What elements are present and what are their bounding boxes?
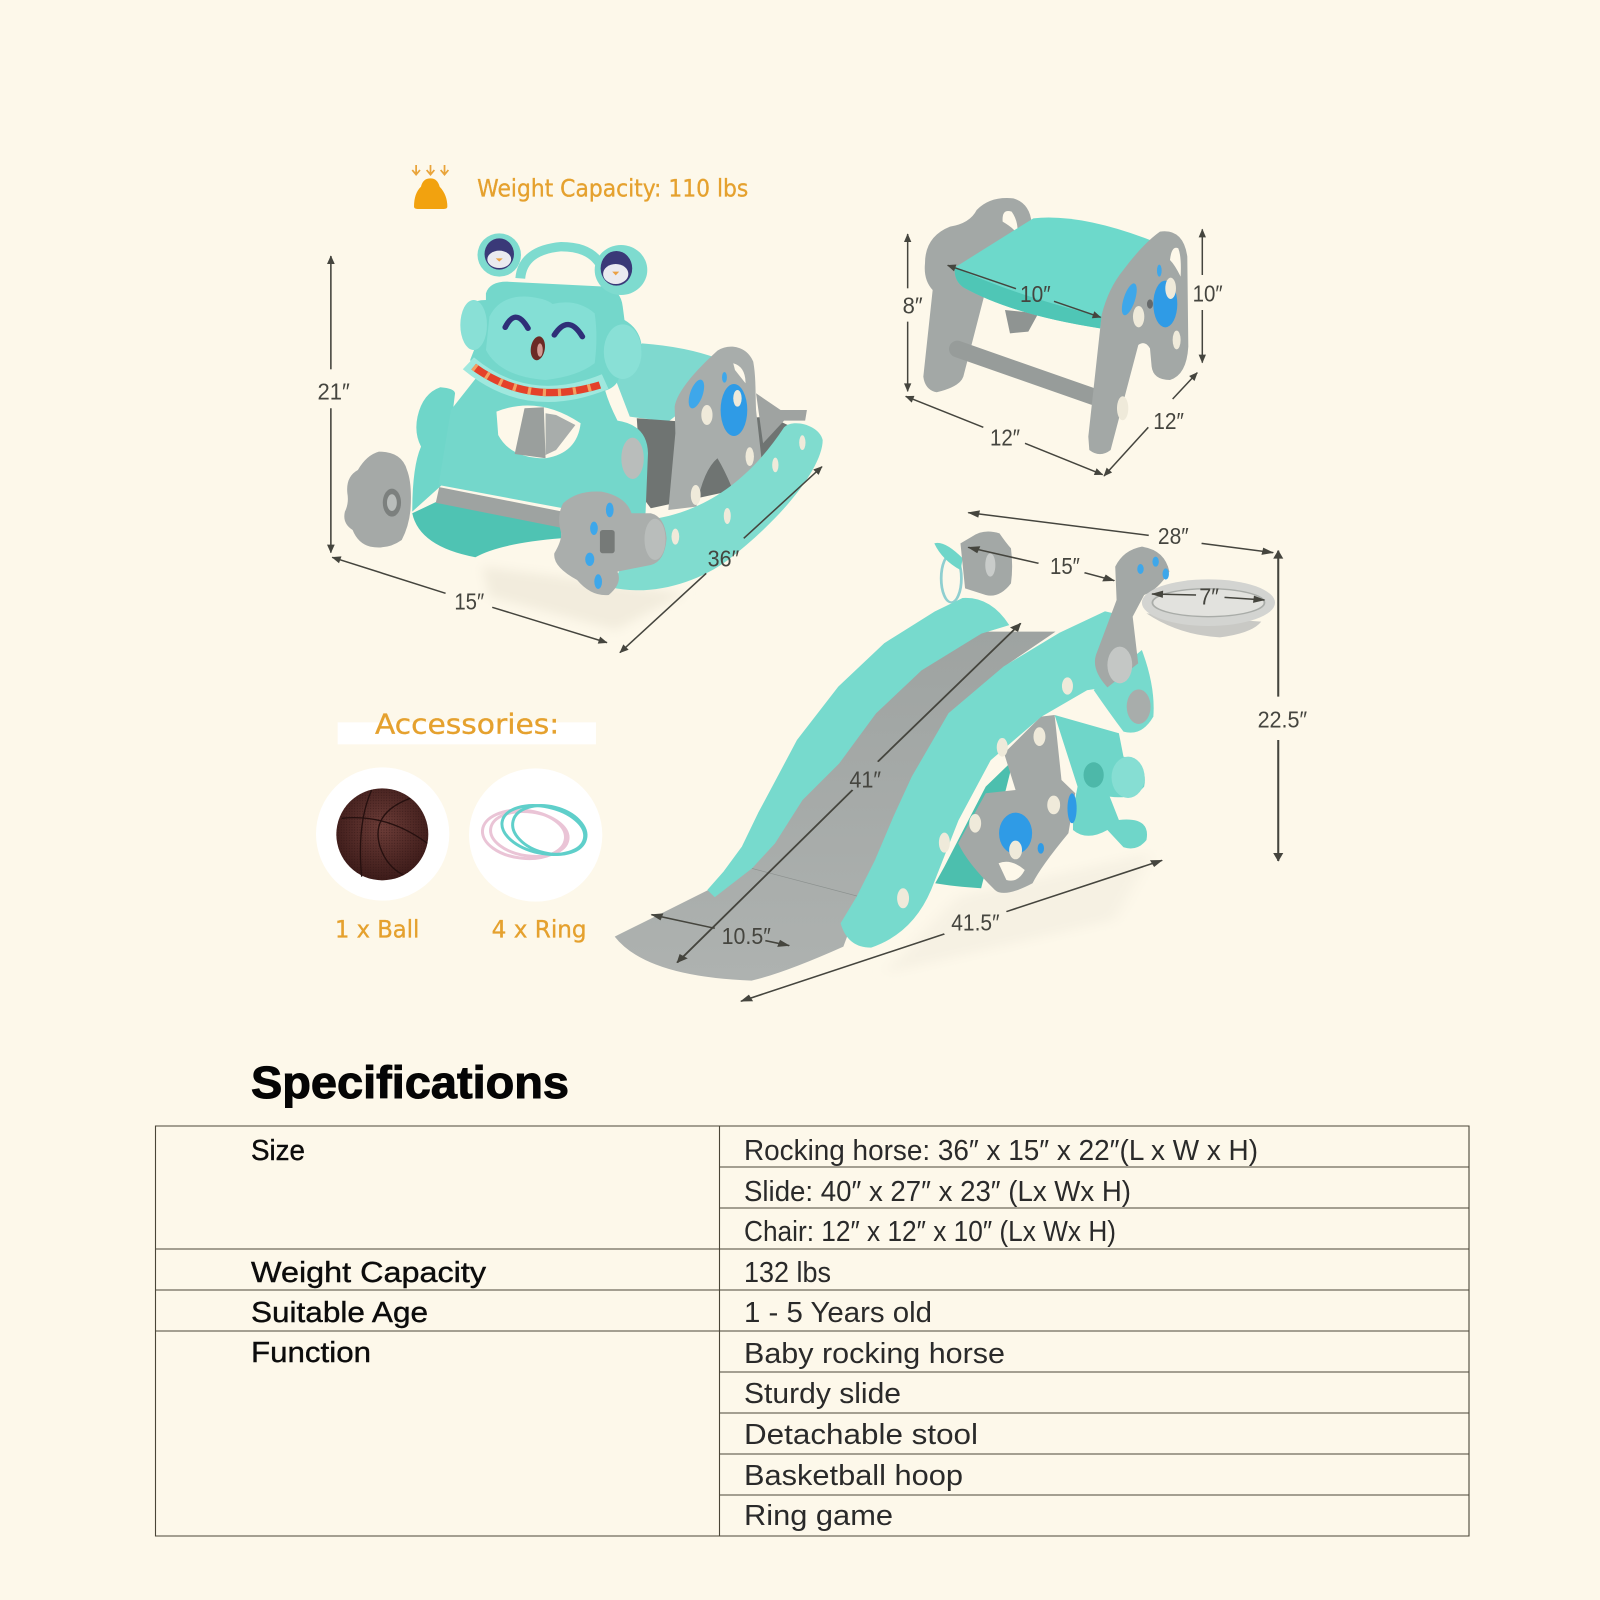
elephant panel	[958, 715, 1075, 893]
weight capacity callout	[412, 165, 748, 209]
seat	[616, 343, 717, 422]
row: function: Sturdy slide	[744, 1378, 901, 1410]
row: size: Size	[251, 1135, 305, 1167]
row: size: Chair: 12″ x 12″ x 10″ (Lx Wx H)	[744, 1216, 1116, 1248]
arrow: 36 inch length: 36″	[708, 546, 739, 571]
row: function: Ring game	[744, 1500, 893, 1532]
teal back assembly	[1055, 715, 1147, 848]
accessories panel	[316, 707, 602, 943]
chair left panel	[923, 198, 1032, 392]
row: suitable age	[251, 1297, 932, 1329]
scarf	[468, 363, 605, 394]
chair diagram	[903, 198, 1223, 476]
ground shadow	[482, 567, 686, 630]
left gray paw	[960, 531, 1012, 596]
mouth	[529, 336, 547, 361]
table grid	[156, 1126, 1469, 1536]
row: function: Detachable stool	[744, 1419, 978, 1451]
arrow: 21 inch height: 21″	[318, 379, 350, 404]
row: function	[251, 1337, 1005, 1532]
row: function: Baby rocking horse	[744, 1338, 1005, 1370]
row: weight capacity: 132 lbs	[744, 1257, 831, 1289]
arrow: 41 inch slide length: 41″	[849, 767, 881, 793]
ear muffs	[460, 300, 487, 350]
arrow: 12 inch width	[906, 396, 1103, 475]
body	[439, 282, 648, 517]
panda knob disc	[621, 438, 644, 479]
row: weight capacity	[251, 1257, 831, 1289]
row: size: Rocking horse: 36″ x 15″ x 22″(L x W x H)	[744, 1135, 1258, 1167]
right ear with penguin	[595, 245, 647, 295]
row: function: Function	[251, 1337, 371, 1369]
teal connector	[1094, 650, 1154, 733]
row: suitable age: 1 - 5 Years old	[744, 1297, 932, 1329]
arrow: 12 inch width: 12″	[990, 425, 1020, 451]
arrow: 15 inch inner width: 15″	[1050, 553, 1080, 579]
right gray paw arm	[1095, 547, 1169, 687]
arrow: 10 inch height	[1193, 229, 1223, 363]
arrow: 28 inch width: 28″	[1158, 523, 1189, 549]
elephant panel	[668, 347, 762, 510]
accessories heading band	[338, 722, 596, 744]
arrow: 8 inch height: 8″	[903, 292, 923, 318]
arrow: 10.5 inch slide width: 10.5″	[722, 923, 771, 949]
rings behind	[941, 554, 961, 602]
chair rear leg	[1005, 310, 1038, 333]
arrow: 7 inch hoop: 7″	[1199, 584, 1219, 609]
arrow: 10.5 inch slide width	[651, 915, 789, 949]
right rail	[841, 612, 1119, 947]
arrow: 41.5 inch length: 41.5″	[951, 910, 1000, 936]
right bone knob	[554, 491, 667, 595]
row: size	[251, 1135, 1258, 1248]
icon: weight with arrows	[412, 165, 448, 209]
accessories heading: Accessories:	[375, 707, 559, 740]
rings icon	[469, 768, 602, 902]
slats	[637, 417, 791, 508]
arrow: 12 inch depth	[1104, 373, 1197, 476]
slide back	[756, 393, 807, 443]
teal tail	[934, 543, 963, 570]
ball icon	[316, 767, 449, 901]
arrow: 10 inch seat	[948, 265, 1101, 317]
left ear with penguin	[478, 233, 521, 277]
arrow: 15 inch inner width	[968, 547, 1114, 581]
left flower knob	[344, 452, 411, 547]
ball label: 1 x Ball	[335, 915, 419, 943]
specifications table	[156, 1126, 1469, 1536]
ring label: 4 x Ring	[492, 915, 587, 943]
specifications title: Specifications	[251, 1057, 569, 1108]
chair right panel	[1088, 231, 1188, 454]
arrow: 41.5 inch length	[741, 860, 1162, 1001]
handle	[520, 247, 602, 278]
row: function: Basketball hoop	[744, 1460, 963, 1492]
pole in hole	[515, 407, 546, 458]
arrow: 12 inch depth: 12″	[1153, 408, 1184, 434]
side panel	[412, 387, 455, 512]
weight capacity text: Weight Capacity: 110 lbs	[477, 174, 748, 203]
teal inner under bridge	[935, 760, 1013, 888]
eyes	[505, 317, 582, 337]
arrow: 28 inch width	[968, 513, 1273, 553]
face	[486, 297, 596, 380]
slide diagram	[615, 513, 1307, 1001]
arrow: 36 inch length	[620, 467, 822, 653]
slide surface	[615, 632, 1056, 981]
arrow: 7 inch hoop	[1152, 584, 1264, 609]
arrow: 15 inch width: 15″	[454, 589, 484, 614]
basketball hoop	[1142, 579, 1275, 637]
rear teal skirt	[412, 502, 561, 557]
row: weight capacity: Weight Capacity	[251, 1257, 487, 1289]
chair bar	[957, 349, 1093, 397]
belly hole	[496, 405, 581, 458]
arrow: 41 inch slide length	[677, 623, 1021, 963]
arrow: 10 inch height: 10″	[1193, 281, 1223, 307]
row: suitable age: Suitable Age	[251, 1297, 428, 1329]
arrow: 10 inch seat: 10″	[1020, 281, 1051, 307]
chair seat	[955, 218, 1150, 328]
left rail	[708, 598, 1009, 897]
rocking horse diagram	[318, 233, 823, 653]
ground shadow	[885, 853, 1151, 973]
gray bar	[438, 495, 567, 521]
arrow: 15 inch width	[332, 557, 607, 643]
arrow: 22.5 inch height: 22.5″	[1258, 707, 1307, 732]
rocker	[610, 423, 823, 590]
row: size: Slide: 40″ x 27″ x 23″ (Lx Wx H)	[744, 1176, 1131, 1208]
